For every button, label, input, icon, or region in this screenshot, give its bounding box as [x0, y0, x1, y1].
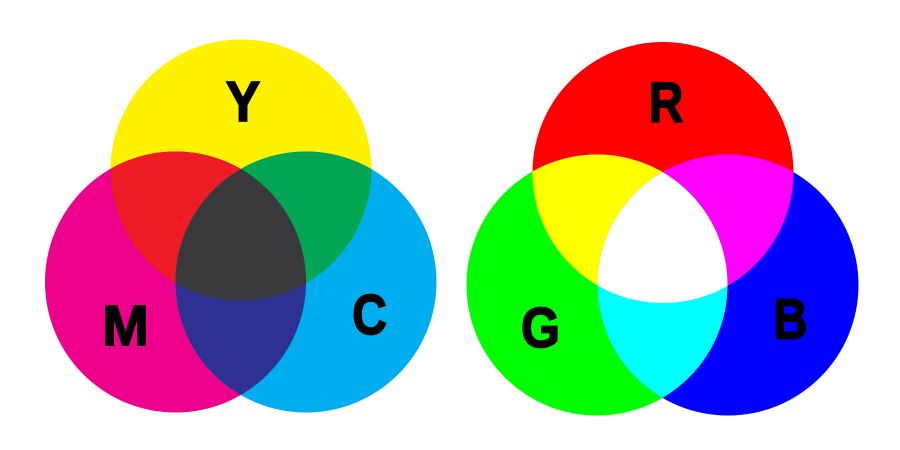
label: G: G [521, 296, 560, 360]
label: B: B [773, 288, 808, 352]
diagram: additive RGB color model [466, 42, 858, 416]
overlap: green and blue, cyan [598, 172, 728, 398]
label: Y: Y [226, 71, 260, 134]
circle: cyan [176, 152, 436, 412]
circle: yellow [110, 40, 372, 300]
overlap: magenta and cyan, blue [176, 169, 306, 395]
circle: red [532, 42, 794, 303]
label: M: M [102, 293, 149, 357]
overlap: yellow and magenta, red [110, 152, 241, 283]
label: R: R [649, 71, 683, 135]
overlap: all three, near black [176, 169, 306, 300]
label: C: C [352, 283, 387, 347]
diagram: subtractive CMY color model [45, 40, 436, 412]
overlap: all three, white [598, 172, 728, 303]
overlap: red and green, yellow [532, 154, 662, 286]
circle: magenta [45, 152, 306, 412]
overlap: yellow and cyan, green [176, 152, 372, 283]
overlap: red and blue, magenta [598, 154, 794, 286]
circle: green [466, 154, 728, 416]
circle: blue [598, 154, 858, 416]
